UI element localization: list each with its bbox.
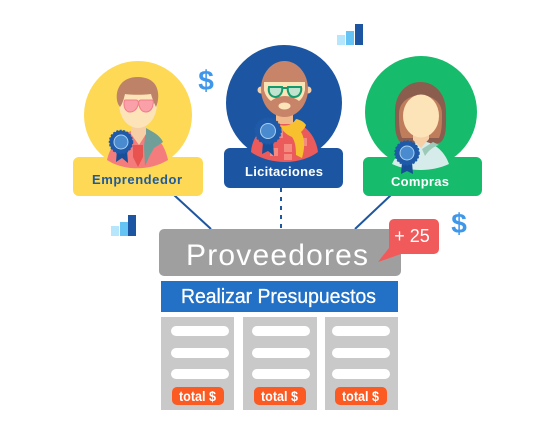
panel: emprendedor: [73, 61, 203, 196]
label text: emprendedor: Emprendedor: [92, 172, 182, 187]
label text: compras: Compras: [391, 174, 449, 189]
connector: emprendedor to proveedores: [174, 195, 211, 229]
icon: bars top: [337, 24, 363, 45]
label box: compras: [363, 157, 482, 196]
column 2: [243, 317, 317, 410]
icon: compras person: [392, 82, 449, 170]
icon: dollar sign top left: $: [198, 65, 214, 96]
icon: licitaciones person: [251, 61, 318, 162]
callout: +25 badge: [378, 219, 439, 262]
column 1: total $: [179, 388, 216, 404]
icon: ribbon rosette: [255, 118, 281, 156]
panel: proveedores heading bar: [159, 229, 401, 276]
icon: dollar sign right: $: [451, 208, 467, 239]
label box: emprendedor: [73, 157, 203, 196]
banner: realizar presupuestos: [161, 281, 398, 312]
callout: +25 badge: + 25: [394, 226, 430, 246]
blue circle: [226, 45, 342, 161]
panel: compras: [363, 56, 482, 196]
icon: emprendedor person: [107, 77, 168, 168]
label text: licitaciones: Licitaciones: [245, 164, 323, 179]
column 3: total $: [342, 388, 379, 404]
panel: licitaciones: [224, 45, 343, 188]
icon: ribbon rosette: [395, 141, 419, 174]
heading: proveedores: Proveedores: [186, 239, 368, 272]
green circle: [365, 56, 477, 168]
icon: ribbon rosette: [110, 130, 132, 163]
label box: licitaciones: [224, 148, 343, 188]
column 2: total $: [261, 388, 298, 404]
column 1: [161, 317, 234, 410]
column 3: [325, 317, 398, 410]
banner: realizar presupuestos: Realizar Presupuestos: [181, 286, 376, 308]
connector: licitaciones to proveedores: [280, 188, 282, 229]
yellow circle: [84, 61, 192, 169]
icon: bars left: [111, 215, 136, 236]
connector: compras to proveedores: [355, 195, 391, 229]
